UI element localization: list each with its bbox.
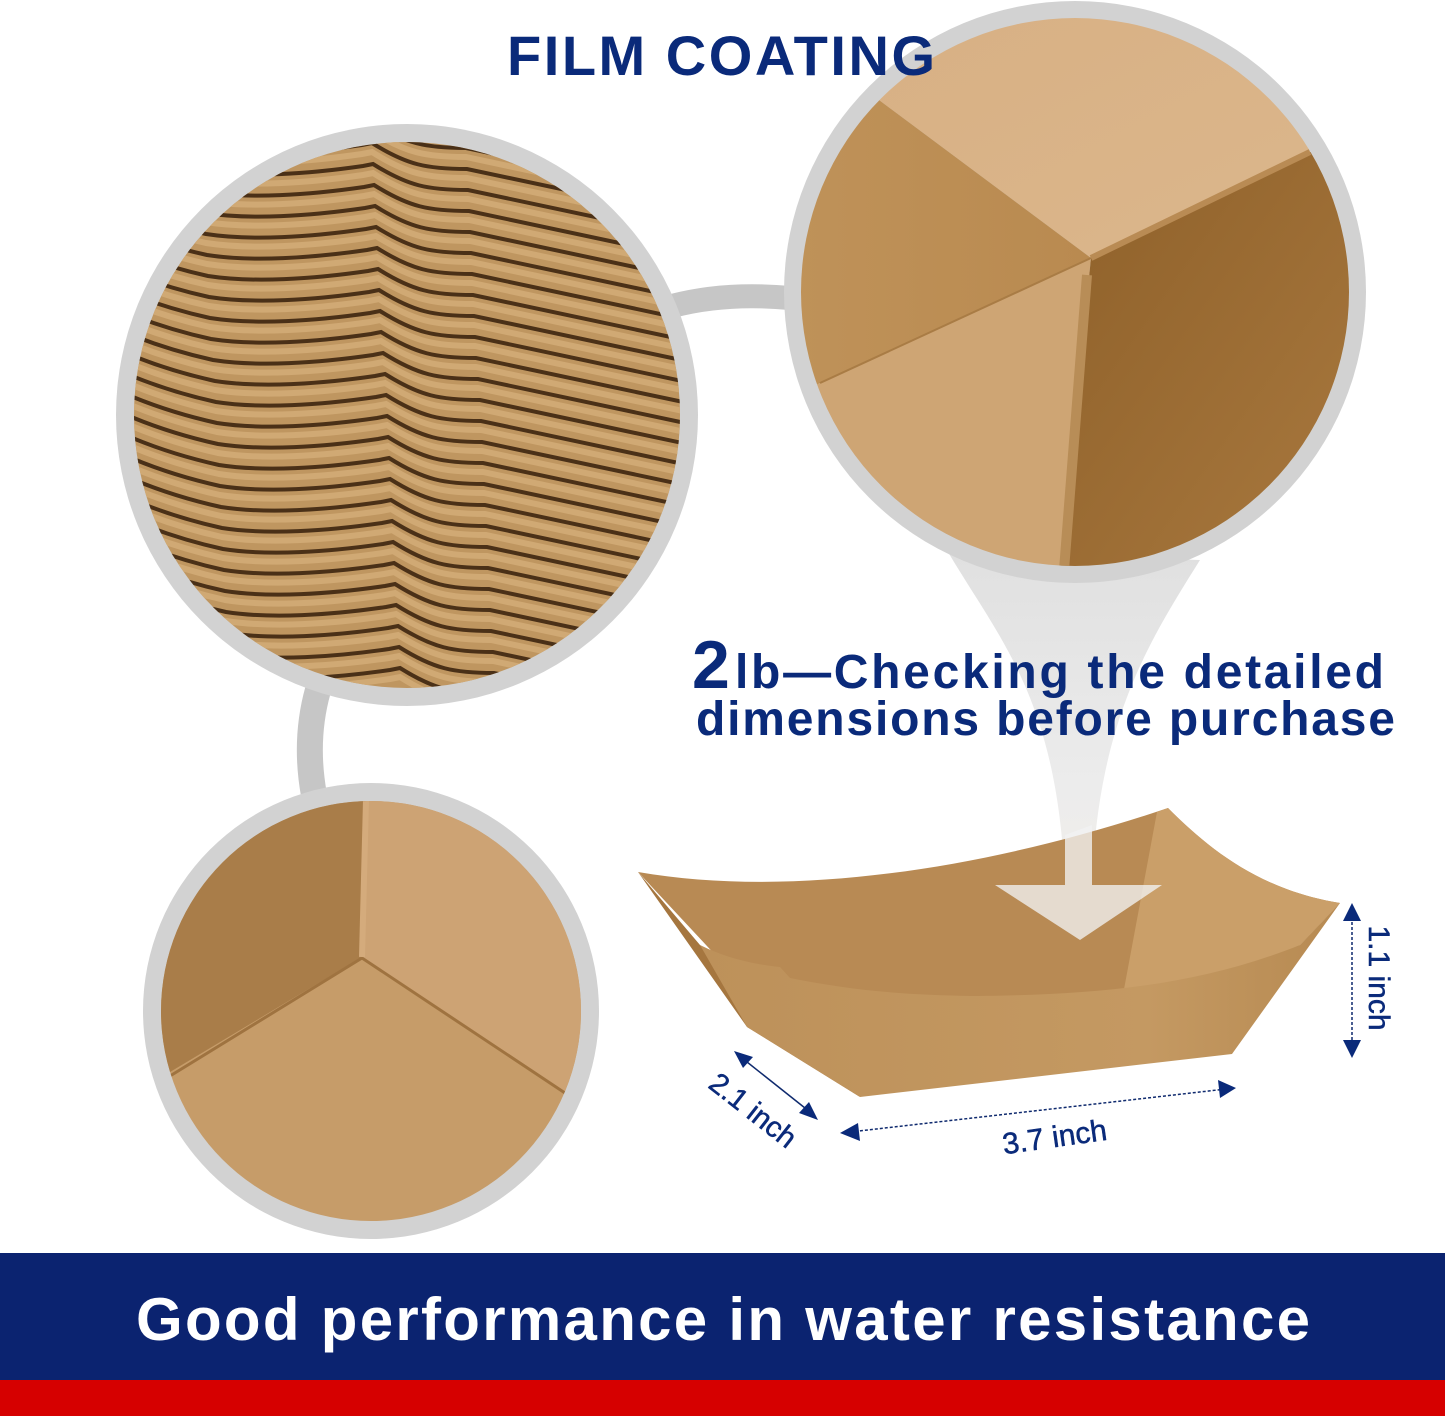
corner photo [790,10,1360,580]
length label: 3.7 inch [1000,1114,1109,1161]
height label: 1.1 inch [1362,925,1395,1031]
circle: stacked tray edges [116,124,698,706]
banner text: Good performance in water resistance [136,1286,1310,1353]
inner corner photo [150,790,590,1230]
width arrowheads [734,1051,818,1120]
product: kraft paper tray [638,808,1340,1097]
red band [0,1380,1445,1416]
pointer arrow over tray [995,825,1162,940]
banner [0,1253,1445,1416]
tray front panel [700,903,1340,1097]
tray left edge [638,872,860,1097]
heading line two: dimensions before purchase [696,693,1395,746]
ring [143,783,599,1239]
length arrow [850,1089,1226,1132]
height arrow [1351,912,1353,1048]
dimension: height [1343,903,1395,1058]
dimension: width [703,1051,818,1155]
dimension: length [840,1080,1236,1161]
tray interior right facet [1122,808,1340,1000]
height arrowheads [1343,903,1361,1058]
connector: left circles [310,690,318,795]
title: FILM COATING [507,24,935,87]
ring [784,1,1366,583]
large numeral: 2 [692,627,730,703]
tray back and interior [638,808,1340,1010]
navy band [0,1253,1445,1380]
circle: inner corner close-up [143,783,599,1239]
connector: top circles [672,296,790,306]
circle: corner fold close-up [784,1,1366,583]
heading: dimensions [692,627,1395,746]
stacked edges photo [134,142,680,688]
width label: 2.1 inch [703,1067,802,1155]
callout pointer funnel [948,552,1200,885]
length arrowheads [840,1080,1236,1141]
width arrow [742,1058,810,1112]
heading line one: lb—Checking the detailed [735,646,1384,699]
ring [116,124,698,706]
